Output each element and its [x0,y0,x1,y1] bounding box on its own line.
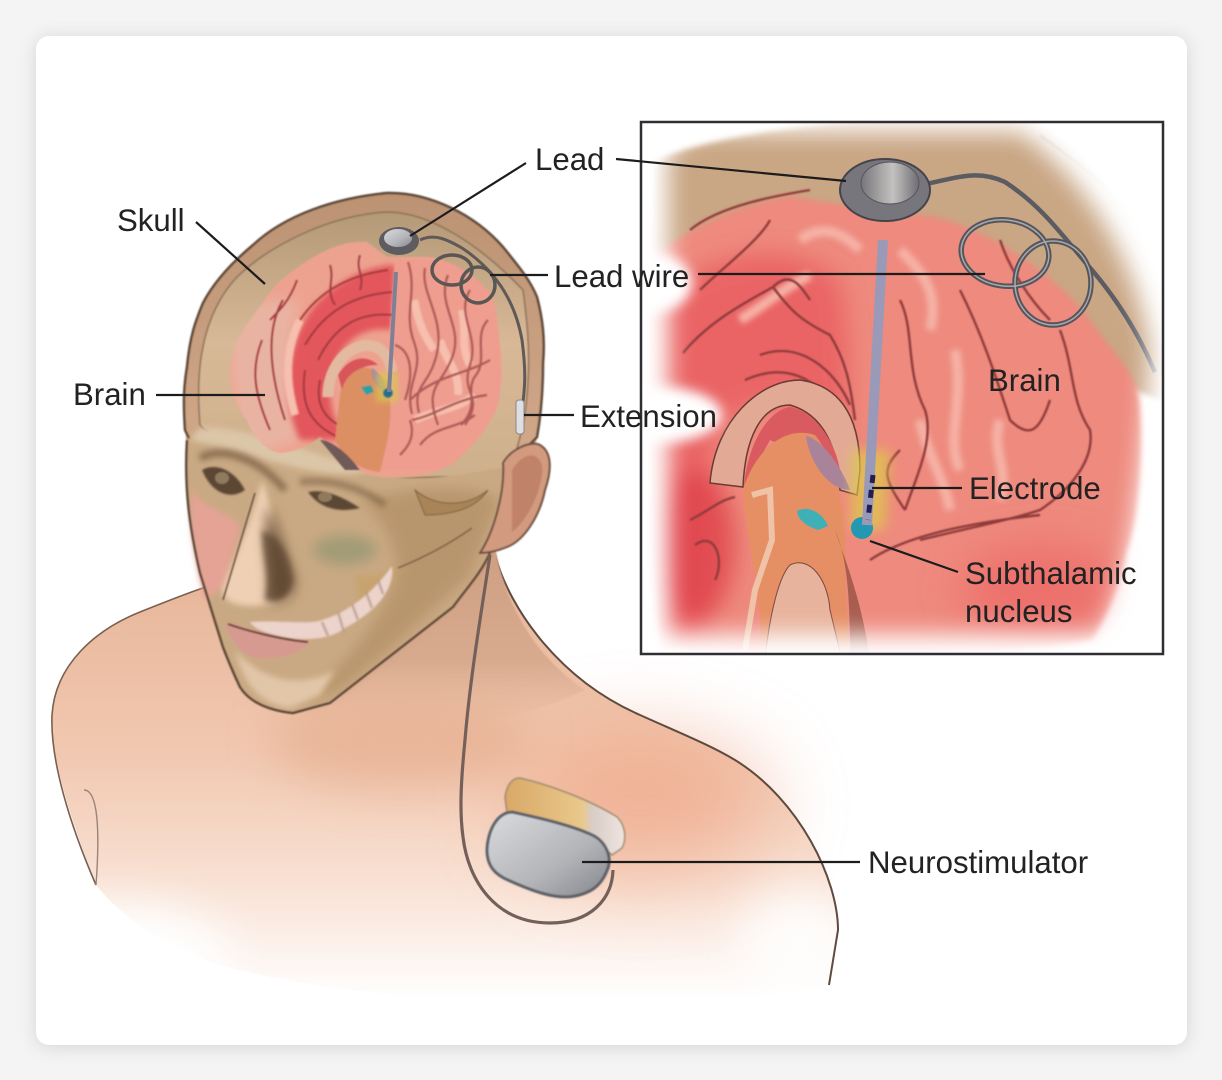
corpus callosum arc [328,346,392,397]
left eye [202,467,245,495]
ear [480,444,550,553]
face [187,431,525,713]
forehead band [190,428,370,474]
torso outline [52,587,206,885]
label: Brain left: Brain [73,377,146,412]
inset brain [648,196,1142,657]
folds left [255,255,392,438]
illustration: neck wire to neurostimulator [461,555,613,923]
brow shadow [200,453,285,490]
label: Electrode: Electrode [969,471,1101,506]
jaw bone lines [398,528,472,568]
label: Subthalamic nucleus: nucleus [965,594,1072,629]
label: Subthalamic nucleus: Subthalamic [965,556,1137,591]
pink right hemisphere [390,265,398,331]
inset midbrain [710,380,860,495]
nuclei [361,385,374,395]
nose [222,480,293,606]
electrode glow [376,372,398,402]
inset panel [640,120,1164,656]
teeth [250,566,392,639]
electrode glow [850,450,890,530]
grey-green cheek bone [313,535,377,565]
label: Lead: Lead [535,142,604,177]
skull cap [184,193,544,470]
label: Neurostimulator: Neurostimulator [868,845,1088,880]
nucleus [851,517,873,539]
face outline [186,440,490,713]
neck [293,545,585,730]
lobe highlights [288,300,475,420]
pink left cheek [191,490,240,600]
illustration: brain [225,242,502,477]
illustration: lead, wire and extension [379,227,525,434]
red inner folds [288,265,395,440]
skull outer rim [1040,135,1062,152]
pale highlights [740,231,1003,510]
folds right [395,262,490,455]
illustration: patient torso [51,555,839,986]
inset gyri [683,190,1091,580]
pale frontal lobe [230,298,298,450]
brown temple and jaw tones [300,488,500,705]
inset lead [867,240,883,525]
label: Skull: Skull [117,203,185,238]
lips [226,622,310,658]
inset burr cap [840,159,930,221]
head base [184,193,544,713]
neurostimulator [487,778,625,897]
leader lines [156,159,985,862]
midbrain [335,367,390,472]
illustration: head [184,193,585,730]
right eye [308,491,360,510]
label: Extension: Extension [580,399,717,434]
inset skull tone [650,120,1163,400]
white vignette [642,123,1162,653]
chin [235,650,335,708]
label: Brain inset: Brain [988,363,1061,398]
red zones [655,254,848,640]
inset wire [925,175,1155,372]
inner skull [199,212,529,480]
label: Lead wire: Lead wire [554,259,689,294]
